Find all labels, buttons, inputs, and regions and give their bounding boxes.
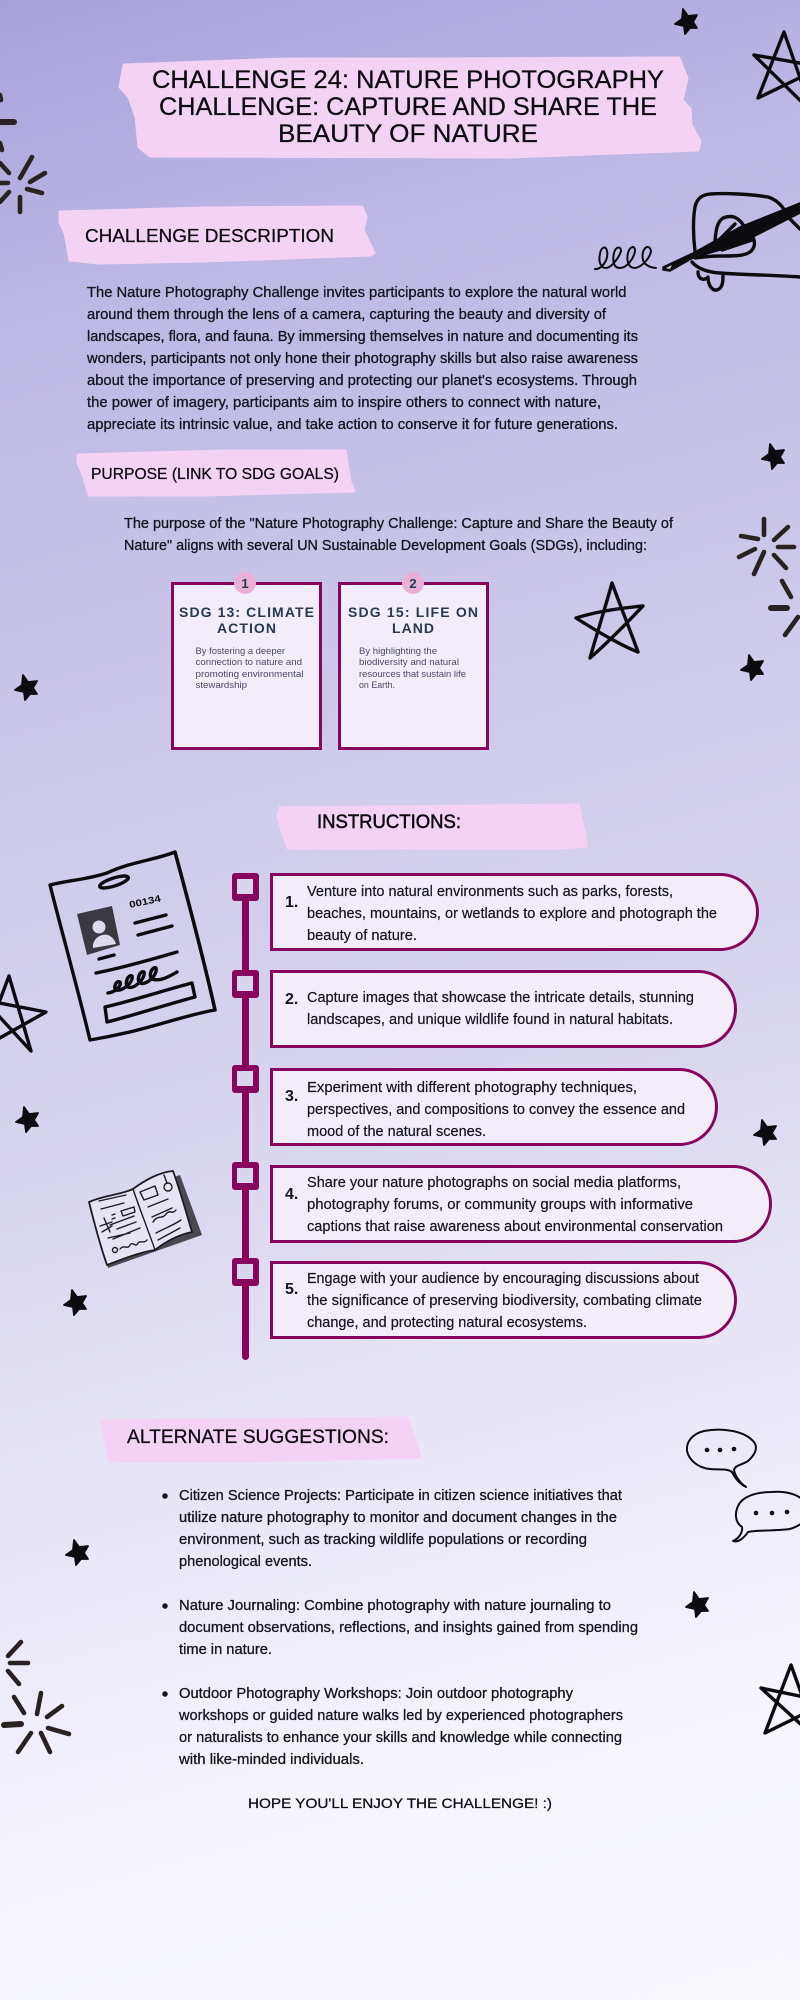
step 1: beauty of nature.	[307, 927, 417, 944]
sparkle: right	[739, 519, 798, 635]
list: alternate suggestions	[162, 1487, 638, 1768]
card title: SDG 13: SDG 13: CLIMATE	[179, 604, 314, 620]
step 5: Engage with your audience by encouraging discussions about	[307, 1270, 700, 1287]
icon: open book	[89, 1171, 202, 1268]
text: challenge description: the power of imagery, participants aim to inspire others to connect with nature,	[87, 394, 601, 411]
text: challenge description: The Nature Photography Challenge invites participants to explore the natural world	[87, 284, 626, 301]
heading: alternate suggestions: ALTERNATE SUGGESTIONS:	[127, 1427, 389, 1448]
icon: ID badge	[50, 852, 215, 1040]
text: challenge description: around them through the lens of a camera, capturing the beauty and diversity of	[87, 306, 607, 323]
star: small left	[15, 675, 37, 700]
text: purpose intro	[124, 515, 674, 554]
title banner	[120, 58, 700, 157]
card text: SDG 15	[359, 646, 466, 691]
heading: alternate suggestions	[101, 1418, 420, 1461]
heading: challenge description: CHALLENGE DESCRIPTION	[85, 226, 334, 246]
sparkle: lower left	[4, 1642, 69, 1752]
bullet: nature journaling: time in nature.	[179, 1641, 272, 1658]
bullet: citizen science: Citizen Science Projects: Participate in citizen science initiatives that	[179, 1487, 623, 1504]
bullet: nature journaling	[162, 1597, 638, 1658]
card text: SDG 13: promoting environmental	[196, 669, 304, 680]
card title: SDG 13: ACTION	[217, 620, 276, 636]
step 1: beaches, mountains, or wetlands to explore and photograph the	[307, 905, 717, 922]
step 5: change, and protecting natural ecosystems.	[307, 1314, 587, 1331]
icon: pen scribble	[595, 247, 656, 269]
heading: purpose	[78, 451, 354, 495]
step 1: 1.	[285, 894, 298, 911]
sparkle: top left	[0, 95, 45, 212]
timeline	[232, 873, 259, 1360]
star: top small	[675, 9, 697, 34]
text: challenge description: appreciate its intrinsic value, and take action to conserve it for future generations.	[87, 416, 618, 433]
text: challenge description: about the importance of preserving and protecting our planet's ecosystems. Through	[87, 372, 637, 389]
bullet: nature journaling: document observations, reflections, and insights gained from spending	[179, 1619, 638, 1636]
card text: SDG 13: connection to nature and	[196, 657, 302, 668]
card text: SDG 15: resources that sustain life	[359, 669, 466, 680]
star: small lower left 2	[66, 1540, 88, 1565]
step 3: mood of the natural scenes.	[307, 1123, 486, 1140]
bullet: outdoor workshops	[162, 1685, 623, 1768]
step 4: 4.	[285, 1186, 298, 1203]
bullet: outdoor workshops: workshops or guided nature walks led by experienced photographers	[178, 1707, 623, 1724]
bullet: outdoor workshops: Outdoor Photography Workshops: Join outdoor photography	[179, 1685, 573, 1702]
heading: challenge description	[60, 207, 374, 263]
bullet: citizen science: phenological events.	[179, 1553, 312, 1570]
star: small right upper	[762, 444, 784, 469]
step 3	[272, 1070, 716, 1144]
star: left outline	[0, 976, 46, 1051]
bullet: citizen science	[162, 1487, 623, 1570]
icon: hand writing with pen	[663, 194, 800, 290]
badge: 2: 2	[409, 576, 417, 591]
heading: instructions	[278, 805, 586, 848]
step 2: Capture images that showcase the intricate details, stunning	[307, 989, 694, 1006]
star: lower right outline	[761, 1665, 800, 1740]
step 2	[272, 972, 736, 1046]
card title: SDG 13	[179, 604, 314, 636]
step 3: 3.	[285, 1088, 298, 1105]
heading: instructions: INSTRUCTIONS:	[317, 812, 461, 833]
card text: SDG 15: By highlighting the	[359, 646, 437, 657]
step 5: the significance of preserving biodiversity, combating climate	[307, 1292, 702, 1309]
bullet: citizen science: utilize nature photography to monitor and document changes in the	[179, 1509, 617, 1526]
card text: SDG 13: By fostering a deeper	[196, 646, 285, 657]
star: top right outline	[754, 32, 800, 112]
bullet: nature journaling: Nature Journaling: Combine photography with nature journaling to	[179, 1597, 611, 1614]
step 4	[272, 1166, 770, 1242]
card text: SDG 13	[196, 646, 304, 691]
badge: 2	[402, 572, 424, 594]
bullet: outdoor workshops: or naturalists to enhance your skills and knowledge while connecting	[179, 1729, 622, 1746]
step 2: landscapes, and unique wildlife found in natural habitats.	[307, 1011, 673, 1028]
bullet: outdoor workshops: with like-minded individuals.	[178, 1751, 364, 1768]
title banner: BEAUTY OF NATURE	[278, 120, 538, 148]
star: small right middle	[754, 1120, 776, 1145]
card text: SDG 15: on Earth.	[359, 680, 395, 691]
step 4: Share your nature photographs on social media platforms,	[307, 1174, 681, 1191]
step 5	[272, 1262, 736, 1338]
step 1: Venture into natural environments such as parks, forests,	[307, 883, 673, 900]
step 4: captions that raise awareness about environmental conservation	[307, 1218, 723, 1235]
icon: speech bubble one	[687, 1430, 756, 1487]
badge: 1: 1	[241, 576, 249, 591]
text: challenge description: landscapes, flora, and fauna. By immersing themselves in nature and documenting its	[87, 328, 638, 345]
star: small right	[741, 655, 763, 680]
step 5: 5.	[285, 1281, 298, 1298]
badge: 1	[234, 572, 256, 594]
star: centre right outline	[576, 583, 643, 658]
card: SDG 15	[340, 572, 488, 748]
closing message: HOPE YOU'LL ENJOY THE CHALLENGE! :)	[248, 1795, 552, 1811]
star: small lower left	[64, 1290, 86, 1315]
step 3: perspectives, and compositions to convey the essence and	[307, 1101, 685, 1118]
title banner: CHALLENGE 24: NATURE PHOTOGRAPHY	[152, 66, 664, 94]
step 1	[272, 874, 758, 950]
step 2: 2.	[285, 991, 298, 1008]
title banner: CHALLENGE: CAPTURE AND SHARE THE	[159, 93, 657, 121]
card text: SDG 15: biodiversity and natural	[359, 657, 459, 668]
star: small left middle	[16, 1107, 38, 1132]
text: purpose intro: Nature" aligns with several UN Sustainable Development Goals (SDGs), including:	[124, 537, 647, 554]
heading: purpose: PURPOSE (LINK TO SDG GOALS)	[91, 466, 339, 483]
card: SDG 13	[172, 572, 320, 748]
card title: SDG 15	[348, 604, 478, 636]
bullet: citizen science: environment, such as tracking wildlife populations or recording	[179, 1531, 587, 1548]
text: challenge description: wonders, participants not only hone their photography skills but also raise awareness	[86, 350, 638, 367]
text: challenge description	[86, 284, 638, 433]
card text: SDG 13: stewardship	[196, 680, 247, 691]
card title: SDG 15: SDG 15: LIFE ON	[348, 604, 478, 620]
text: purpose intro: The purpose of the "Nature Photography Challenge: Capture and Share the Beauty of	[124, 515, 674, 532]
step 3: Experiment with different photography techniques,	[307, 1079, 637, 1096]
card title: SDG 15: LAND	[392, 620, 434, 636]
step 4: photography forums, or community groups with informative	[307, 1196, 693, 1213]
star: small lower right	[686, 1592, 708, 1617]
icon: ID badge: 00134	[128, 893, 163, 911]
icon: speech bubble two	[733, 1492, 800, 1541]
